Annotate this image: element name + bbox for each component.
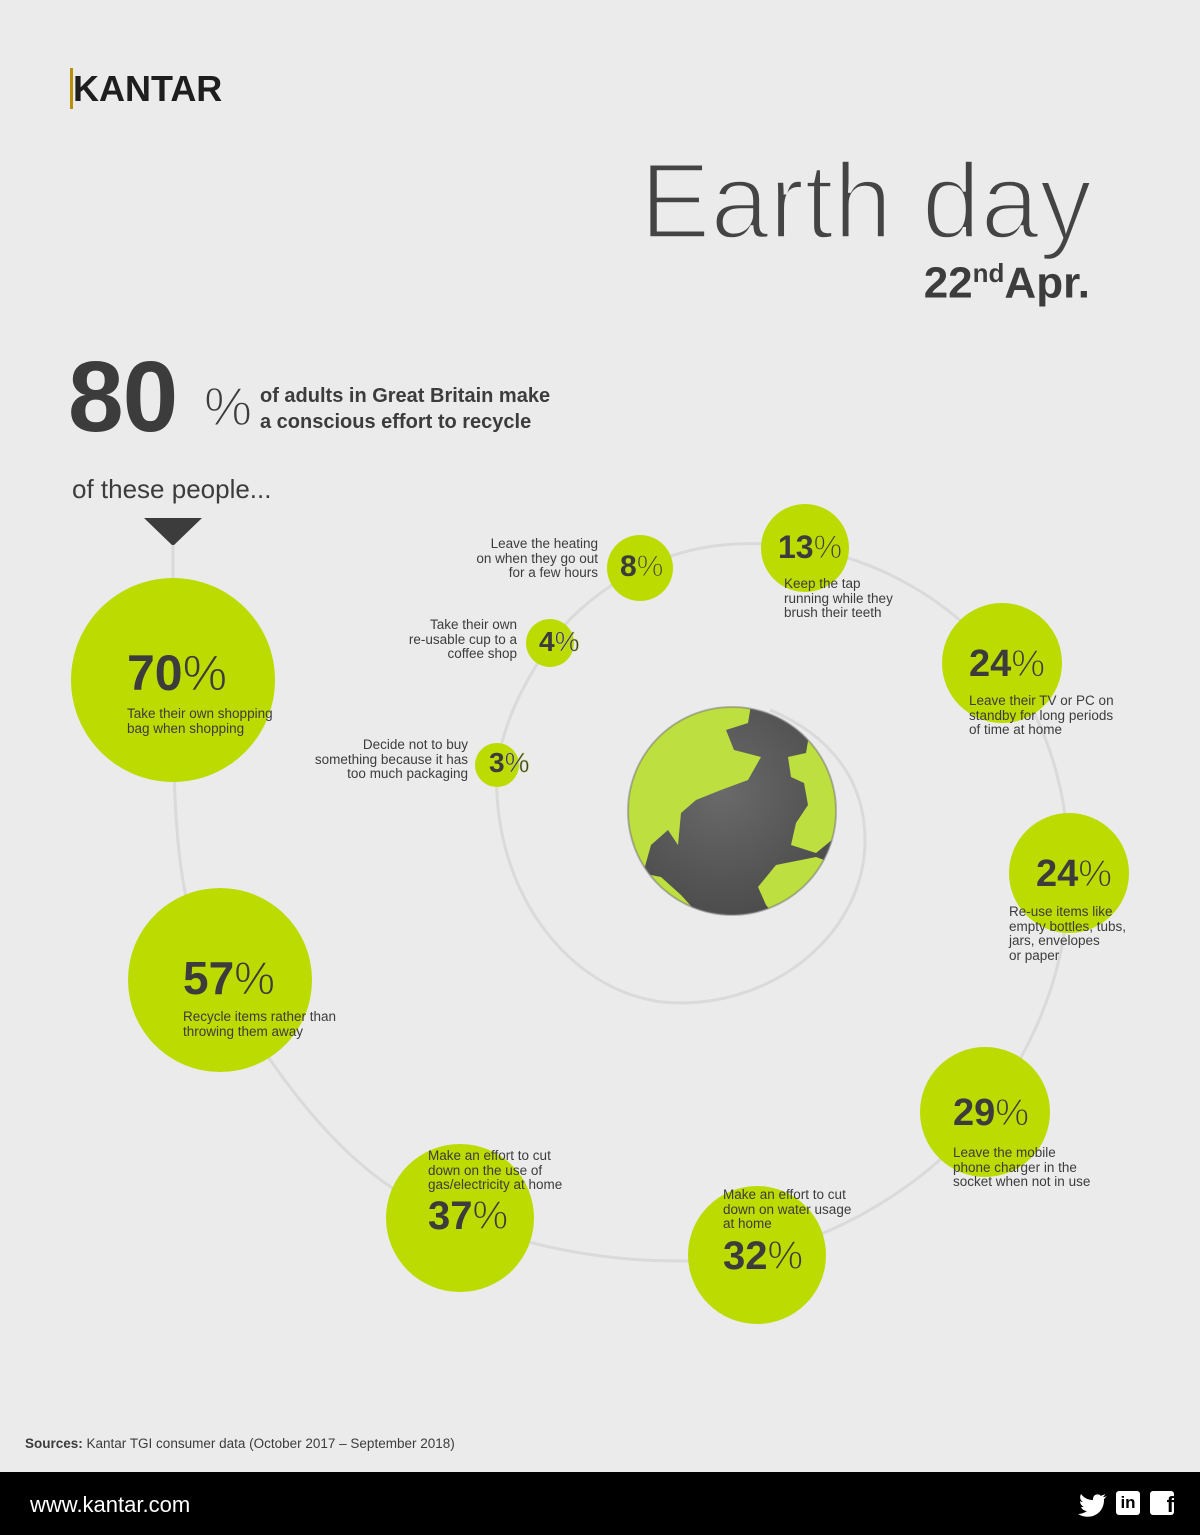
title: Earth day	[640, 140, 1092, 261]
text: 57%	[183, 952, 275, 1004]
text: 32%	[723, 1234, 803, 1278]
bubble 8%	[607, 535, 673, 601]
text: 24%	[969, 643, 1045, 685]
bubble 70%	[71, 578, 275, 782]
text: on when they go out	[476, 550, 598, 566]
date: 22ndApr.	[924, 258, 1090, 308]
text: gas/electricity at home	[428, 1177, 562, 1192]
social icons: f	[1167, 1492, 1174, 1517]
text: for a few hours	[509, 565, 598, 580]
bubble 4%	[526, 619, 574, 667]
text: 13%	[778, 529, 842, 565]
text: 37%	[428, 1194, 508, 1238]
text: Keep the tap	[784, 576, 861, 591]
url: www.kantar.com	[30, 1492, 190, 1517]
sources: Sources: Kantar TGI consumer data (October 2017 – September 2018)	[25, 1436, 455, 1451]
bubble 57%	[128, 888, 312, 1072]
social icons: in	[1120, 1493, 1136, 1512]
text: or paper	[1009, 948, 1059, 962]
text: 70%	[127, 645, 227, 701]
text: too much packaging	[347, 766, 468, 781]
text: Make an effort to cut	[428, 1148, 551, 1163]
bubble 24% standby	[942, 603, 1062, 723]
text: Take their own	[430, 617, 517, 632]
bubble 13%	[761, 504, 849, 592]
globe	[627, 706, 837, 916]
text: Leave the heating	[491, 536, 598, 551]
text: running while they	[784, 590, 893, 606]
text: Take their own shopping	[127, 706, 273, 721]
text: throwing them away	[183, 1024, 303, 1038]
subheading: of these people...	[72, 474, 271, 504]
text: Make an effort to cut	[723, 1187, 846, 1202]
text: Decide not to buy	[363, 737, 468, 752]
headline stat: %	[204, 377, 252, 437]
social icons	[1078, 1491, 1174, 1517]
text: something because it has	[315, 752, 468, 766]
text: brush their teeth	[784, 605, 882, 620]
text: socket when not in use	[953, 1174, 1090, 1189]
text: phone charger in the	[953, 1160, 1077, 1174]
text: 29%	[953, 1092, 1029, 1134]
bubble 37%	[386, 1144, 534, 1292]
text: Re-use items like	[1009, 904, 1113, 919]
headline stat: of adults in Great Britain make	[260, 385, 550, 407]
text: Leave the mobile	[953, 1145, 1056, 1160]
text: bag when shopping	[127, 720, 244, 736]
arrow	[144, 518, 202, 546]
text: down on the use of	[428, 1162, 542, 1178]
text: re-usable cup to a	[409, 632, 517, 646]
text: 3%	[489, 747, 529, 778]
text: empty bottles, tubs,	[1009, 918, 1126, 934]
text: standby for long periods	[969, 708, 1113, 722]
text: 4%	[539, 626, 579, 657]
logo: KANTAR	[73, 68, 222, 109]
headline stat: 80	[68, 341, 177, 453]
text: down on water usage	[723, 1202, 851, 1216]
bubble 29%	[920, 1047, 1050, 1177]
bubble 32%	[688, 1186, 826, 1324]
footer	[0, 1472, 1200, 1535]
text: 24%	[1036, 853, 1112, 895]
text: 8%	[620, 550, 663, 583]
text: Leave their TV or PC on	[969, 693, 1114, 708]
headline stat	[68, 341, 550, 453]
text: coffee shop	[447, 646, 517, 661]
text: jars, envelopes	[1009, 933, 1100, 948]
headline stat: a conscious effort to recycle	[260, 411, 531, 433]
text: at home	[723, 1216, 772, 1231]
text: Recycle items rather than	[183, 1009, 336, 1024]
bubble 3%	[475, 743, 519, 787]
bubble 24% reuse	[1009, 813, 1129, 933]
text: of time at home	[969, 722, 1062, 737]
